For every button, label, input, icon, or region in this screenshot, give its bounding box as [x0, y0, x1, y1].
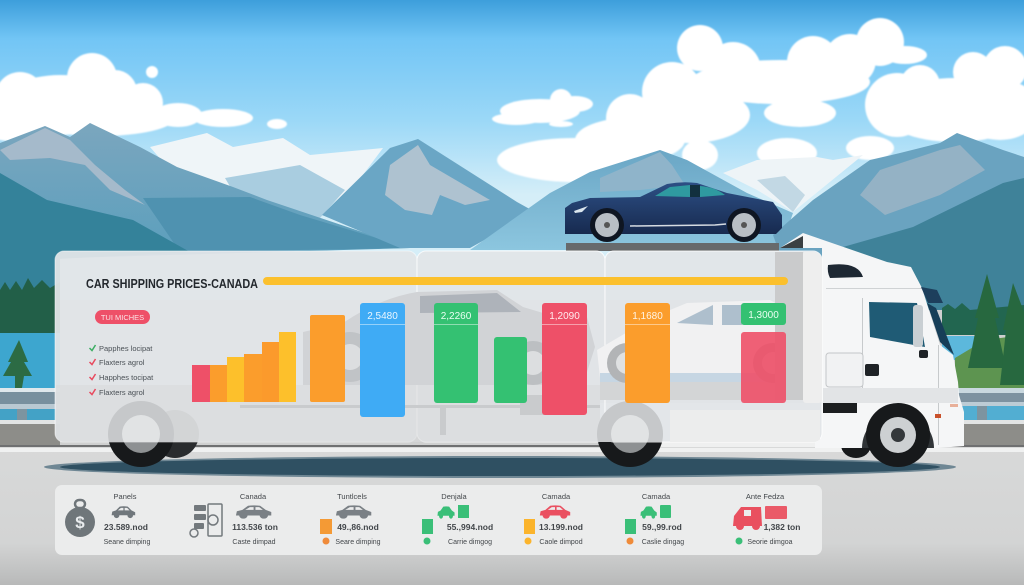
item 5: Camada: Camada	[542, 492, 571, 501]
ghost: mid wheel	[597, 402, 663, 442]
icon: documents and coins	[190, 504, 222, 537]
bar: blue	[360, 303, 405, 417]
icon: car	[112, 506, 135, 518]
car wheel: front	[590, 208, 624, 242]
item 4: Denjala: Carrie dimgog	[448, 539, 492, 546]
truck	[108, 233, 964, 467]
check item 3: Happhes tocipat	[99, 373, 154, 382]
road shadow	[44, 456, 956, 478]
icon: green car	[437, 506, 455, 519]
mountain: peak behind car	[470, 150, 793, 250]
panel: left	[55, 251, 417, 442]
item 3: Tuntlcels: 49.,86.nod	[337, 522, 379, 532]
car on top of truck	[565, 182, 782, 251]
check item 2: Flaxters agrol	[99, 358, 145, 367]
item 7: Ante Fedza	[733, 492, 800, 546]
item 1: Panels: Panels	[114, 492, 137, 501]
title: CAR SHIPPING PRICES-CANADA	[86, 277, 258, 291]
item 5: Camada: Caole dimpod	[539, 539, 583, 546]
item 2: Canada: 113.536 ton	[232, 522, 278, 532]
icon: red car	[540, 505, 570, 519]
item 4: Denjala: Denjala	[441, 492, 468, 501]
car platform	[566, 243, 779, 251]
mountain: far right peak	[773, 133, 1024, 310]
icon: green dot	[736, 538, 742, 544]
item 2: Canada	[190, 492, 278, 546]
icon: amber dot	[524, 538, 532, 544]
car headlight	[574, 206, 588, 213]
icon: orange dot	[322, 538, 330, 544]
cloud: right	[497, 18, 1024, 182]
checklist	[90, 344, 154, 397]
item 6: Camada: Caslie dingag	[642, 539, 684, 546]
ghost: white hatchback	[597, 300, 775, 400]
icon: green dot	[424, 538, 430, 544]
item 7: Ante Fedza: Ante Fedza	[746, 492, 785, 501]
item 3: Tuntlcels: Tuntlcels	[337, 492, 367, 501]
car trim	[630, 224, 726, 226]
item 2: Canada: Canada	[240, 492, 267, 501]
sky background	[0, 0, 1024, 300]
icon: green car	[640, 506, 657, 519]
bar: red translucent	[741, 332, 786, 403]
car windows	[655, 185, 690, 197]
item 3: Tuntlcels: Seare dimping	[335, 539, 381, 546]
icon: green block	[625, 519, 636, 534]
ghost: trailer chassis	[240, 395, 600, 435]
bar: red labelled	[542, 303, 587, 415]
icon: money bag: $	[75, 513, 85, 532]
bottom summary panel	[55, 485, 822, 555]
bar: orange labelled: 1,1680	[632, 311, 663, 322]
guardrail	[0, 388, 1024, 445]
main chart panel	[54, 250, 822, 442]
item 5: Camada: 13.199.nod	[539, 522, 583, 532]
left scenery: forest and lake	[0, 252, 60, 393]
bar: blue: 2,5480	[367, 311, 398, 322]
rear dual wheel of cab	[841, 432, 871, 458]
item 1: Panels: 23.589.nod	[104, 522, 148, 532]
icon: red block	[765, 506, 787, 519]
bar: green label tab	[741, 303, 786, 325]
ghost: trailer rear wall	[670, 251, 822, 442]
icon: car	[236, 505, 271, 519]
cloud: left	[0, 53, 287, 141]
right scenery: forest and lake	[942, 274, 1024, 392]
bar: green label tab: 1,3000	[748, 310, 779, 321]
item 1: Panels	[65, 492, 150, 546]
pill label	[95, 310, 150, 324]
item 5: Camada	[524, 492, 583, 546]
check item 4: Flaxters agrol	[99, 388, 145, 397]
icon: red truck	[733, 507, 762, 530]
wheel: trailer rear	[108, 401, 199, 467]
bar: red labelled: 1,2090	[549, 311, 580, 322]
item 4: Denjala: 55.,994.nod	[447, 522, 493, 532]
panel: middle	[417, 251, 605, 442]
item 2: Canada: Caste dimpad	[232, 539, 276, 546]
pill label: TUI MICHES	[101, 313, 144, 322]
item 6: Camada: Camada	[642, 492, 671, 501]
item 7: Ante Fedza: Seorie dimgoa	[747, 539, 793, 546]
ghost imagery seen through the panels	[58, 252, 822, 442]
icon: orange dot	[626, 538, 634, 544]
icon: green block top	[458, 505, 469, 518]
snow range right	[723, 155, 863, 212]
bar chart: staircase bars	[192, 332, 296, 402]
icon: pine trees right	[968, 274, 1024, 385]
icon: green block	[422, 519, 433, 534]
cab	[780, 233, 964, 448]
item 4: Denjala	[422, 492, 493, 546]
ghost: rear wheels	[108, 401, 198, 442]
icon: car	[336, 505, 371, 519]
snow range left	[150, 133, 383, 218]
ghost: dark sedan	[303, 290, 595, 385]
icon: pine tree left	[3, 340, 32, 388]
road	[0, 445, 1024, 585]
mountains	[0, 123, 1024, 310]
cloud: middle	[492, 89, 593, 127]
mountain: centre peak	[322, 139, 535, 248]
wheel: trailer mid	[597, 401, 663, 467]
wheel: front	[866, 403, 930, 467]
item 7: Ante Fedza: 1,382 ton	[764, 522, 800, 532]
icon: amber block	[524, 519, 535, 534]
title underline bar	[263, 277, 788, 285]
item 3: Tuntlcels	[320, 492, 381, 546]
icon: orange block	[320, 519, 332, 534]
mountain: dark forested slopes left	[0, 173, 410, 262]
check item 1: Papphes locipat	[99, 344, 153, 353]
mountain: far left peak	[0, 123, 410, 260]
clouds	[0, 18, 1024, 182]
item 6: Camada	[625, 492, 684, 546]
car body	[565, 182, 782, 234]
trailer underside	[600, 403, 825, 447]
item 6: Camada: 59.,99.rod	[642, 522, 682, 532]
bar: green labelled: 2,2260	[441, 311, 472, 322]
bar: orange labelled	[625, 303, 670, 403]
bar: green short	[494, 337, 527, 403]
item 1: Panels: Seane dimping	[104, 539, 150, 546]
bar: orange tall	[310, 315, 345, 402]
bar: green labelled	[434, 303, 478, 403]
car wheel: rear	[727, 208, 761, 242]
panel: right	[605, 251, 822, 442]
icon: green block top	[660, 505, 671, 518]
